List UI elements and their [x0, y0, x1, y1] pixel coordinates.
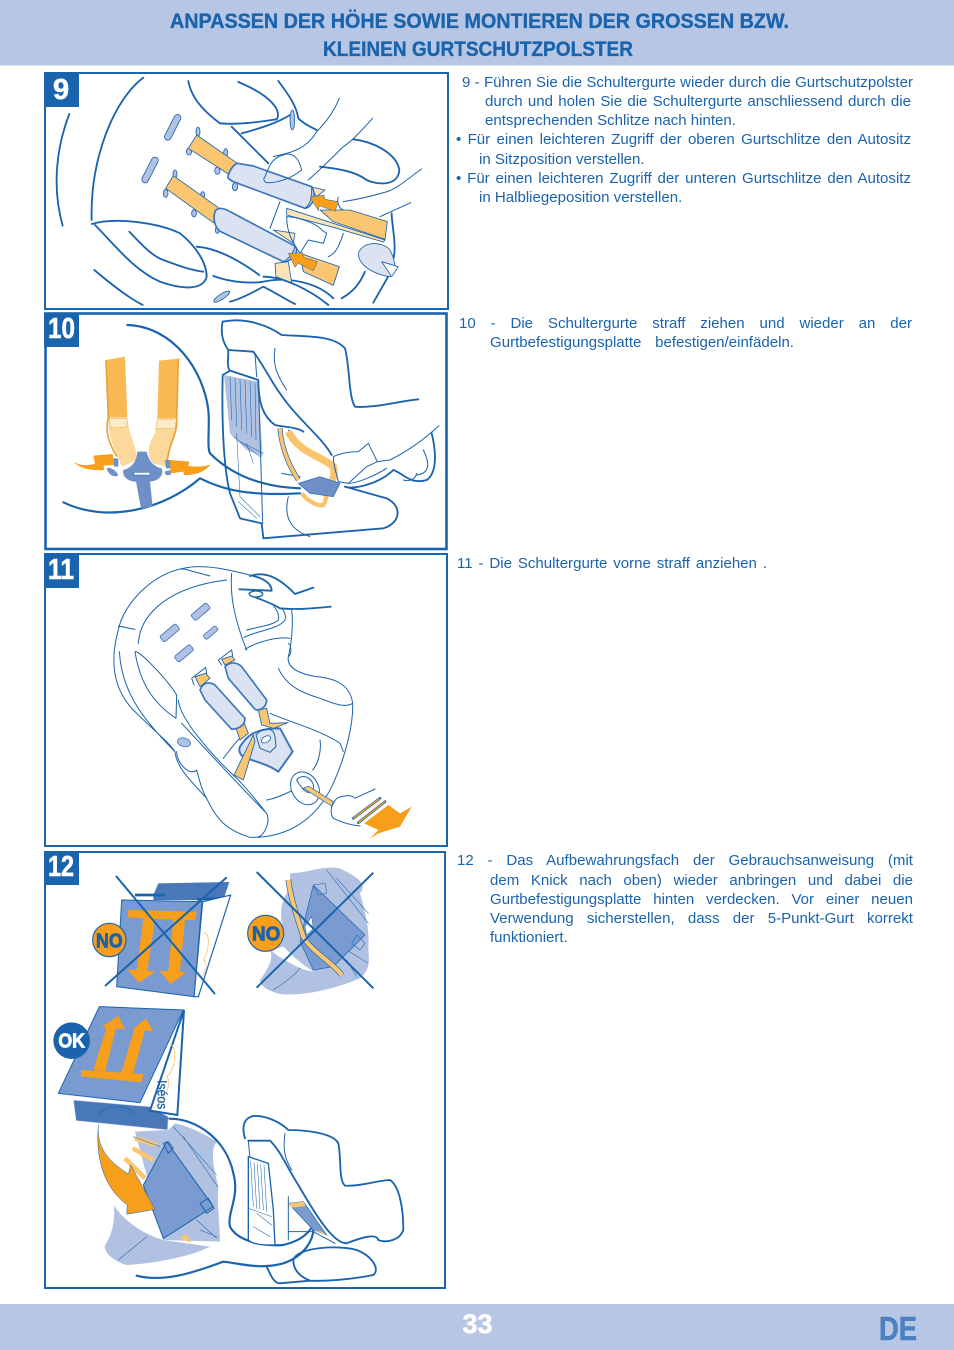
illustration: manual pocket [53, 868, 403, 1283]
number badge 9 [44, 72, 79, 107]
text: entsprechenden Schlitze nach hinten. [485, 112, 736, 129]
wrong position in seat [248, 868, 373, 994]
illustration: pulling shoulder straps tight [114, 567, 412, 839]
text: 12 - Das Aufbewahrungsfach der Gebrauchsanweisung (mit [457, 852, 913, 869]
hand [239, 574, 331, 609]
text: • Für einen leichteren Zugriff der unteren Gurtschlitze den Autositz [456, 170, 911, 187]
orange arrow [353, 798, 412, 839]
number badge 11: 11 [48, 554, 74, 586]
car seat [222, 320, 439, 538]
text: in Sitzposition verstellen. [479, 151, 645, 168]
slots [159, 602, 219, 748]
badge: OK: OK [58, 1031, 85, 1053]
text: 10 - Die Schultergurte straff ziehen und wieder an der [459, 315, 912, 332]
buckle [239, 728, 293, 772]
straps [166, 135, 387, 285]
pocket in seat detail [98, 1123, 220, 1265]
number badge 10: 10 [48, 313, 75, 345]
cross [257, 872, 373, 988]
detail circle arc [137, 1119, 313, 1278]
pull strap and ring [285, 767, 325, 810]
orange arrows [310, 195, 338, 211]
shoulder straps [195, 656, 288, 780]
text block: step 12 [457, 852, 913, 946]
detail circle arcs [63, 325, 300, 512]
page number: 33 [462, 1309, 493, 1339]
text: 9 - Führen Sie die Schultergurte wieder durch die Gurtschutzpolster [462, 74, 913, 91]
buckle [287, 217, 327, 253]
panel: step 9 [44, 72, 448, 309]
orange arrows [73, 454, 211, 475]
illustration: shoulder pads on straps [57, 78, 422, 305]
curved orange arrow [98, 1125, 155, 1214]
padded sleeves [214, 163, 314, 262]
car seat side view [243, 1116, 403, 1283]
illustration: tightening straps at buckle plate [63, 320, 439, 538]
correct orientation manual [53, 1007, 184, 1130]
footer band [0, 1304, 954, 1350]
title [170, 8, 789, 61]
header band [0, 0, 954, 66]
strap detail [73, 357, 211, 508]
hand [264, 154, 302, 183]
buckle plate [123, 452, 162, 508]
text: dem Knick nach oben) wieder anbringen und dabei die [490, 872, 913, 889]
text: in Halbliegeposition verstellen. [479, 189, 682, 206]
cross [105, 876, 227, 994]
language code: DE [879, 1310, 917, 1347]
wrong orientation manual [93, 876, 231, 997]
text: durch und holen Sie die Schultergurte anschliessend durch die [485, 93, 911, 110]
padded sleeves [200, 663, 267, 729]
title: ANPASSEN DER HÖHE SOWIE MONTIEREN DER GROSSEN BZW. [170, 8, 789, 33]
text block: step 10 [459, 315, 912, 351]
straps on seat [280, 428, 298, 480]
text: Gurtbefestigungsplatte befestigen/einfädeln. [490, 334, 794, 351]
text: 11 - Die Schultergurte vorne straff anziehen . [457, 555, 767, 572]
number badge 12: 12 [48, 851, 74, 883]
correct orientation manual: Iséos [154, 1080, 170, 1109]
text block: step 9 [456, 74, 913, 206]
text: Verwendung sicherstellen, dass der 5-Punkt-Gurt korrekt [490, 910, 913, 927]
panel: step 11 [44, 554, 447, 846]
number badge 9: 9 [53, 74, 69, 106]
text: Gurtbefestigungsplatte hinten verdecken. Vor einer neuen [490, 891, 913, 908]
panel: step 10 [44, 313, 446, 549]
text: funktioniert. [490, 929, 568, 946]
badge: NO: NO [252, 924, 280, 946]
panel: step 12 [44, 851, 445, 1288]
title: KLEINEN GURTSCHUTZPOLSTER [323, 37, 633, 61]
text: • Für einen leichteren Zugriff der oberen Gurtschlitze den Autositz [456, 131, 911, 148]
hand [333, 443, 377, 483]
badge: NO: NO [96, 930, 123, 952]
slots [141, 110, 295, 304]
